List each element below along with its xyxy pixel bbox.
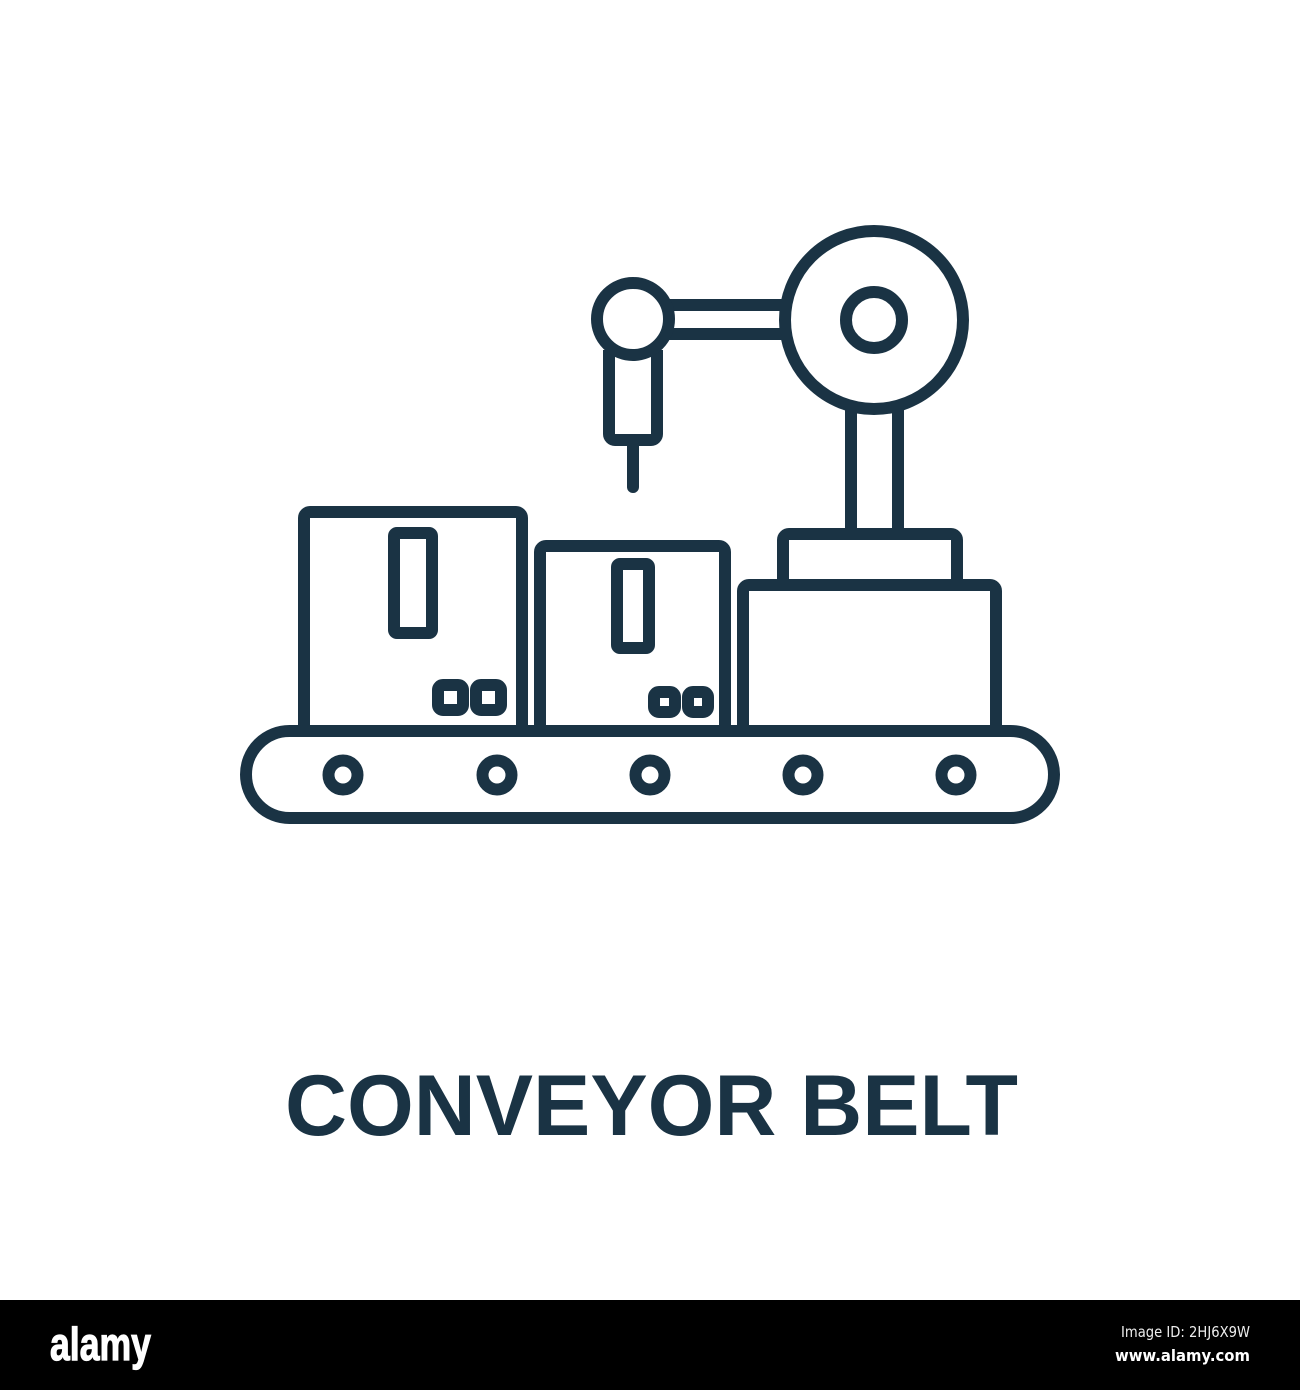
robot shoulder joint <box>785 231 963 409</box>
image id: Image ID: 2HJ6X9W <box>1121 1323 1250 1341</box>
title: CONVEYOR BELT <box>285 1058 1018 1154</box>
footer logo: alamy <box>50 1318 151 1370</box>
robot upper arm <box>666 305 786 334</box>
conveyor belt body <box>246 731 1054 818</box>
conveyor rollers <box>328 760 970 790</box>
robot elbow joint <box>597 283 669 355</box>
small box <box>540 546 725 731</box>
footer bar <box>0 1300 1300 1390</box>
icon: conveyor belt with robot arm <box>246 231 1054 818</box>
website: www.alamy.com <box>1115 1346 1250 1365</box>
robot column <box>851 408 898 534</box>
robot base <box>743 534 996 731</box>
large box <box>304 512 522 731</box>
robot tool head <box>609 350 657 487</box>
